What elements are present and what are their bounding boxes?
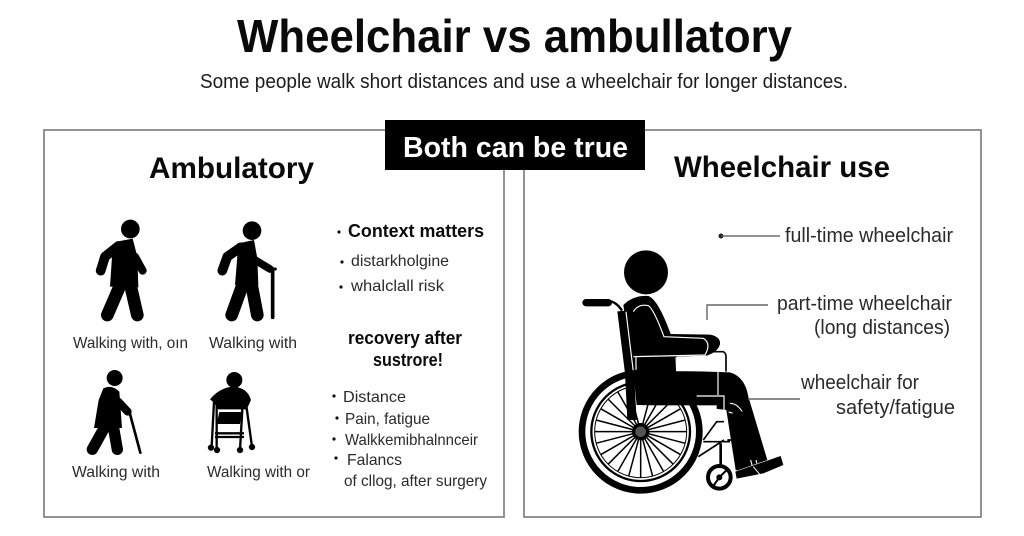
callout: wheelchair for safety/fatigue: wheelchair for — [800, 372, 919, 394]
callout: wheelchair for safety/fatigue — [748, 372, 955, 419]
panel: wheelchair use — [524, 130, 981, 517]
icon: older person with cane — [92, 370, 140, 453]
list: factors: Falancs — [347, 452, 402, 469]
badge: both can be true: Both can be true — [403, 132, 628, 164]
icon: wheelchair user — [582, 250, 783, 490]
list: context matters: whalclall risk — [350, 278, 445, 295]
list: factors: Distance — [343, 389, 406, 406]
title: Wheelchair vs ambullatory — [237, 10, 792, 62]
list: factors: Pain, fatigue — [345, 411, 430, 428]
heading: recovery: sustrore! — [373, 350, 443, 370]
label: walking 1: Walking with, oın — [73, 335, 188, 352]
label: walking 4: Walking with or — [207, 464, 311, 481]
panel: ambulatory — [44, 130, 504, 517]
callout: full-time wheelchair: full-time wheelchair — [785, 225, 953, 247]
icon: person walking — [101, 220, 143, 315]
list: context matters: Context matters — [348, 221, 484, 241]
list: context matters — [337, 221, 484, 295]
label: walking 2: Walking with — [209, 335, 297, 352]
list: factors: Walkkemibhalnnceir — [345, 432, 479, 449]
list: context matters: distarkholgine — [351, 253, 449, 270]
heading: recovery: recovery after — [348, 328, 462, 348]
callout: part-time wheelchair: part-time wheelchair — [777, 293, 952, 315]
label: walking 3: Walking with — [72, 464, 160, 481]
callout: part-time wheelchair: (long distances) — [814, 317, 950, 339]
list: factors — [332, 389, 487, 490]
callout: wheelchair for safety/fatigue: safety/fatigue — [836, 397, 955, 419]
subtitle: Some people walk short distances and use a wheelchair for longer distances. — [200, 71, 848, 93]
badge: both can be true — [385, 120, 645, 170]
heading: ambulatory: Ambulatory — [149, 152, 314, 185]
heading: wheelchair use: Wheelchair use — [674, 151, 890, 184]
heading: recovery — [348, 328, 462, 370]
callout: part-time wheelchair — [707, 293, 952, 339]
icon: person with walker — [208, 372, 255, 453]
list: factors: of cllog, after surgery — [344, 473, 487, 490]
icon: person walking with cane — [222, 221, 275, 317]
